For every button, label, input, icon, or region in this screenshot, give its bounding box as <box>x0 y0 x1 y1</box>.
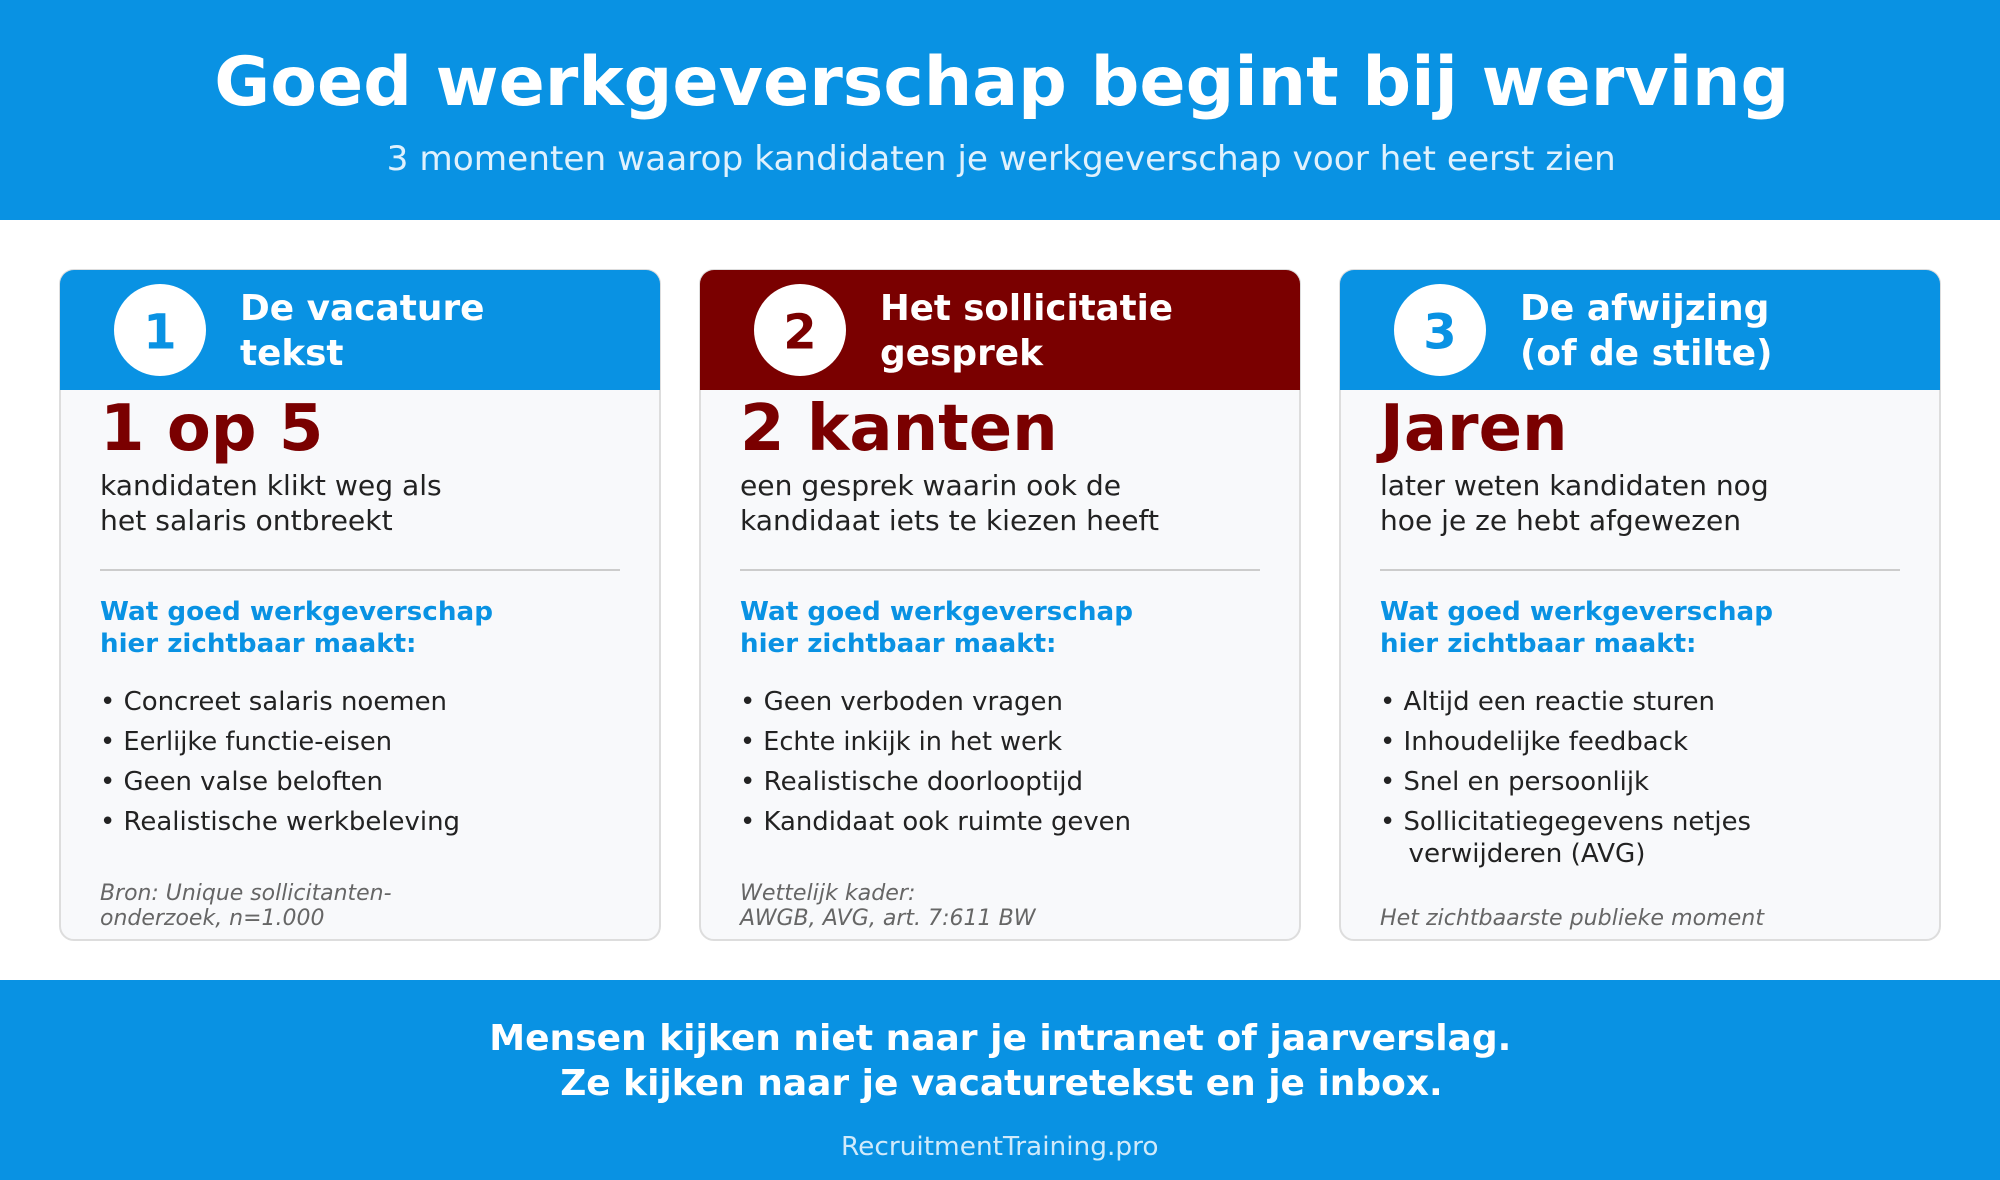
source note <box>100 881 392 931</box>
card 2 heading <box>880 288 1173 374</box>
card 1 heading: De vacature <box>240 288 484 329</box>
footer band <box>0 980 2000 1180</box>
stat description: een gesprek waarin ook de <box>740 469 1121 502</box>
card 3 header <box>1340 270 1940 390</box>
icon: number 1: 1 <box>143 304 177 360</box>
icon: number 3: 3 <box>1423 304 1457 360</box>
bullet list <box>740 687 1131 837</box>
stat: jaren: Jaren <box>1376 392 1568 466</box>
bullet list: • Echte inkijk in het werk <box>740 727 1062 757</box>
legal note <box>738 881 1037 931</box>
bullet list: • Kandidaat ook ruimte geven <box>740 807 1131 837</box>
panel: card 2 het sollicitatiegesprek <box>700 270 1300 940</box>
card 2 header <box>700 270 1300 390</box>
footer source: RecruitmentTraining.pro <box>841 1132 1158 1162</box>
stat: 2 kanten: 2 kanten <box>740 392 1058 466</box>
panel: card 3 de afwijzing <box>1340 270 1940 940</box>
subheading: Wat goed werkgeverschap <box>100 597 493 627</box>
stat description: kandidaat iets te kiezen heeft <box>740 504 1159 537</box>
subheading <box>740 597 1133 659</box>
stat description: kandidaten klikt weg als <box>100 469 442 502</box>
icon: number 3 <box>1394 284 1486 376</box>
bullet list: • Realistische werkbeleving <box>100 807 460 837</box>
legal note: Wettelijk kader: <box>740 881 916 906</box>
bullet list: • Realistische doorlooptijd <box>740 767 1083 797</box>
card 3 heading <box>1520 288 1772 374</box>
icon: number 1 <box>114 284 206 376</box>
stat description: het salaris ontbreekt <box>100 504 393 537</box>
stat description: hoe je ze hebt afgewezen <box>1380 504 1741 537</box>
title: Goed werkgeverschap begint bij werving <box>214 43 1789 122</box>
bullet list: • Concreet salaris noemen <box>100 687 447 717</box>
stat description <box>740 469 1159 537</box>
bullet list: • Eerlijke functie-eisen <box>100 727 392 757</box>
bullet list: • Altijd een reactie sturen <box>1380 687 1715 717</box>
subheading: Wat goed werkgeverschap <box>740 597 1133 627</box>
card 3 heading: De afwijzing <box>1520 288 1769 329</box>
stat description: later weten kandidaten nog <box>1380 469 1769 502</box>
subtitle: 3 momenten waarop kandidaten je werkgeverschap voor het eerst zien <box>387 139 1616 179</box>
bullet list: • Snel en persoonlijk <box>1380 767 1649 797</box>
icon: number 2 <box>754 284 846 376</box>
bullet list: • Geen verboden vragen <box>740 687 1063 717</box>
card 1 header <box>60 270 660 390</box>
footer statement: Ze kijken naar je vacaturetekst en je inbox. <box>560 1063 1443 1104</box>
subheading: hier zichtbaar maakt: <box>740 629 1056 659</box>
card 1 heading: tekst <box>240 333 344 374</box>
bullet list: • Inhoudelijke feedback <box>1380 727 1688 757</box>
panel: card 1 de vacaturetekst <box>60 270 660 940</box>
footer statement: Mensen kijken niet naar je intranet of jaarverslag. <box>489 1018 1511 1059</box>
header band <box>0 0 2000 220</box>
icon: number 2: 2 <box>783 304 817 360</box>
bullet list <box>100 687 460 837</box>
bullet list <box>1380 687 1751 869</box>
subheading <box>1380 597 1773 659</box>
subheading: hier zichtbaar maakt: <box>100 629 416 659</box>
subheading <box>100 597 493 659</box>
legal note: AWGB, AVG, art. 7:611 BW <box>738 906 1037 931</box>
stat description <box>100 469 442 537</box>
bullet list: • Geen valse beloften <box>100 767 383 797</box>
card 1 heading <box>240 288 484 374</box>
stat: 1 op 5: 1 op 5 <box>100 392 323 466</box>
bullet list: verwijderen (AVG) <box>1408 839 1646 869</box>
footer statement <box>489 1018 1511 1104</box>
source note: onderzoek, n=1.000 <box>100 906 324 931</box>
subheading: hier zichtbaar maakt: <box>1380 629 1696 659</box>
card 3 heading: (of de stilte) <box>1520 333 1772 374</box>
note: Het zichtbaarste publieke moment <box>1380 906 1765 931</box>
card 2 heading: gesprek <box>880 333 1044 374</box>
bullet list: • Sollicitatiegegevens netjes <box>1380 807 1751 837</box>
subheading: Wat goed werkgeverschap <box>1380 597 1773 627</box>
source note: Bron: Unique sollicitanten- <box>100 881 392 906</box>
stat description <box>1380 469 1769 537</box>
card 2 heading: Het sollicitatie <box>880 288 1173 329</box>
